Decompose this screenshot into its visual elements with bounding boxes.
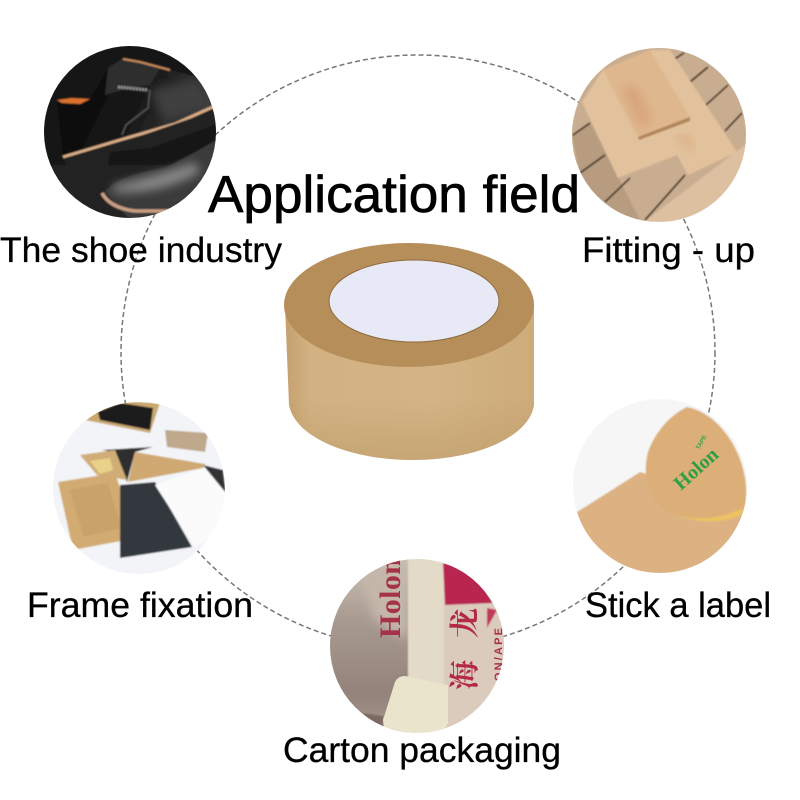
tape roll bbox=[284, 243, 534, 460]
photo: carton packaging bbox=[330, 559, 504, 733]
tape side shading bbox=[285, 305, 534, 460]
carton print: tape band: LON/APE bbox=[493, 628, 505, 690]
label logo small text: TAPE bbox=[696, 435, 709, 451]
label: carton packaging: Carton packaging bbox=[283, 731, 561, 770]
photo: kraft frames bbox=[50, 400, 230, 580]
label: fitting up: Fitting - up bbox=[582, 231, 755, 270]
photo: wood boards bbox=[570, 45, 750, 225]
label logo text: Holon bbox=[670, 444, 723, 495]
photo: kraft label bbox=[570, 395, 750, 580]
title: Application field bbox=[208, 166, 580, 224]
photo: shoe bbox=[40, 40, 220, 220]
label: frame fixation: Frame fixation bbox=[27, 586, 253, 625]
dashed ring connecting the applications bbox=[121, 55, 715, 649]
carton print: brand characters: 海龙 bbox=[440, 608, 484, 690]
tape core hole bbox=[329, 260, 499, 342]
label: shoe industry: The shoe industry bbox=[0, 231, 282, 270]
tape top face bbox=[284, 243, 534, 367]
tape side wall bbox=[285, 305, 534, 460]
carton print: Holon: Holon bbox=[374, 558, 407, 638]
small roll of tape bbox=[383, 676, 448, 737]
label: stick a label: Stick a label bbox=[585, 586, 771, 625]
